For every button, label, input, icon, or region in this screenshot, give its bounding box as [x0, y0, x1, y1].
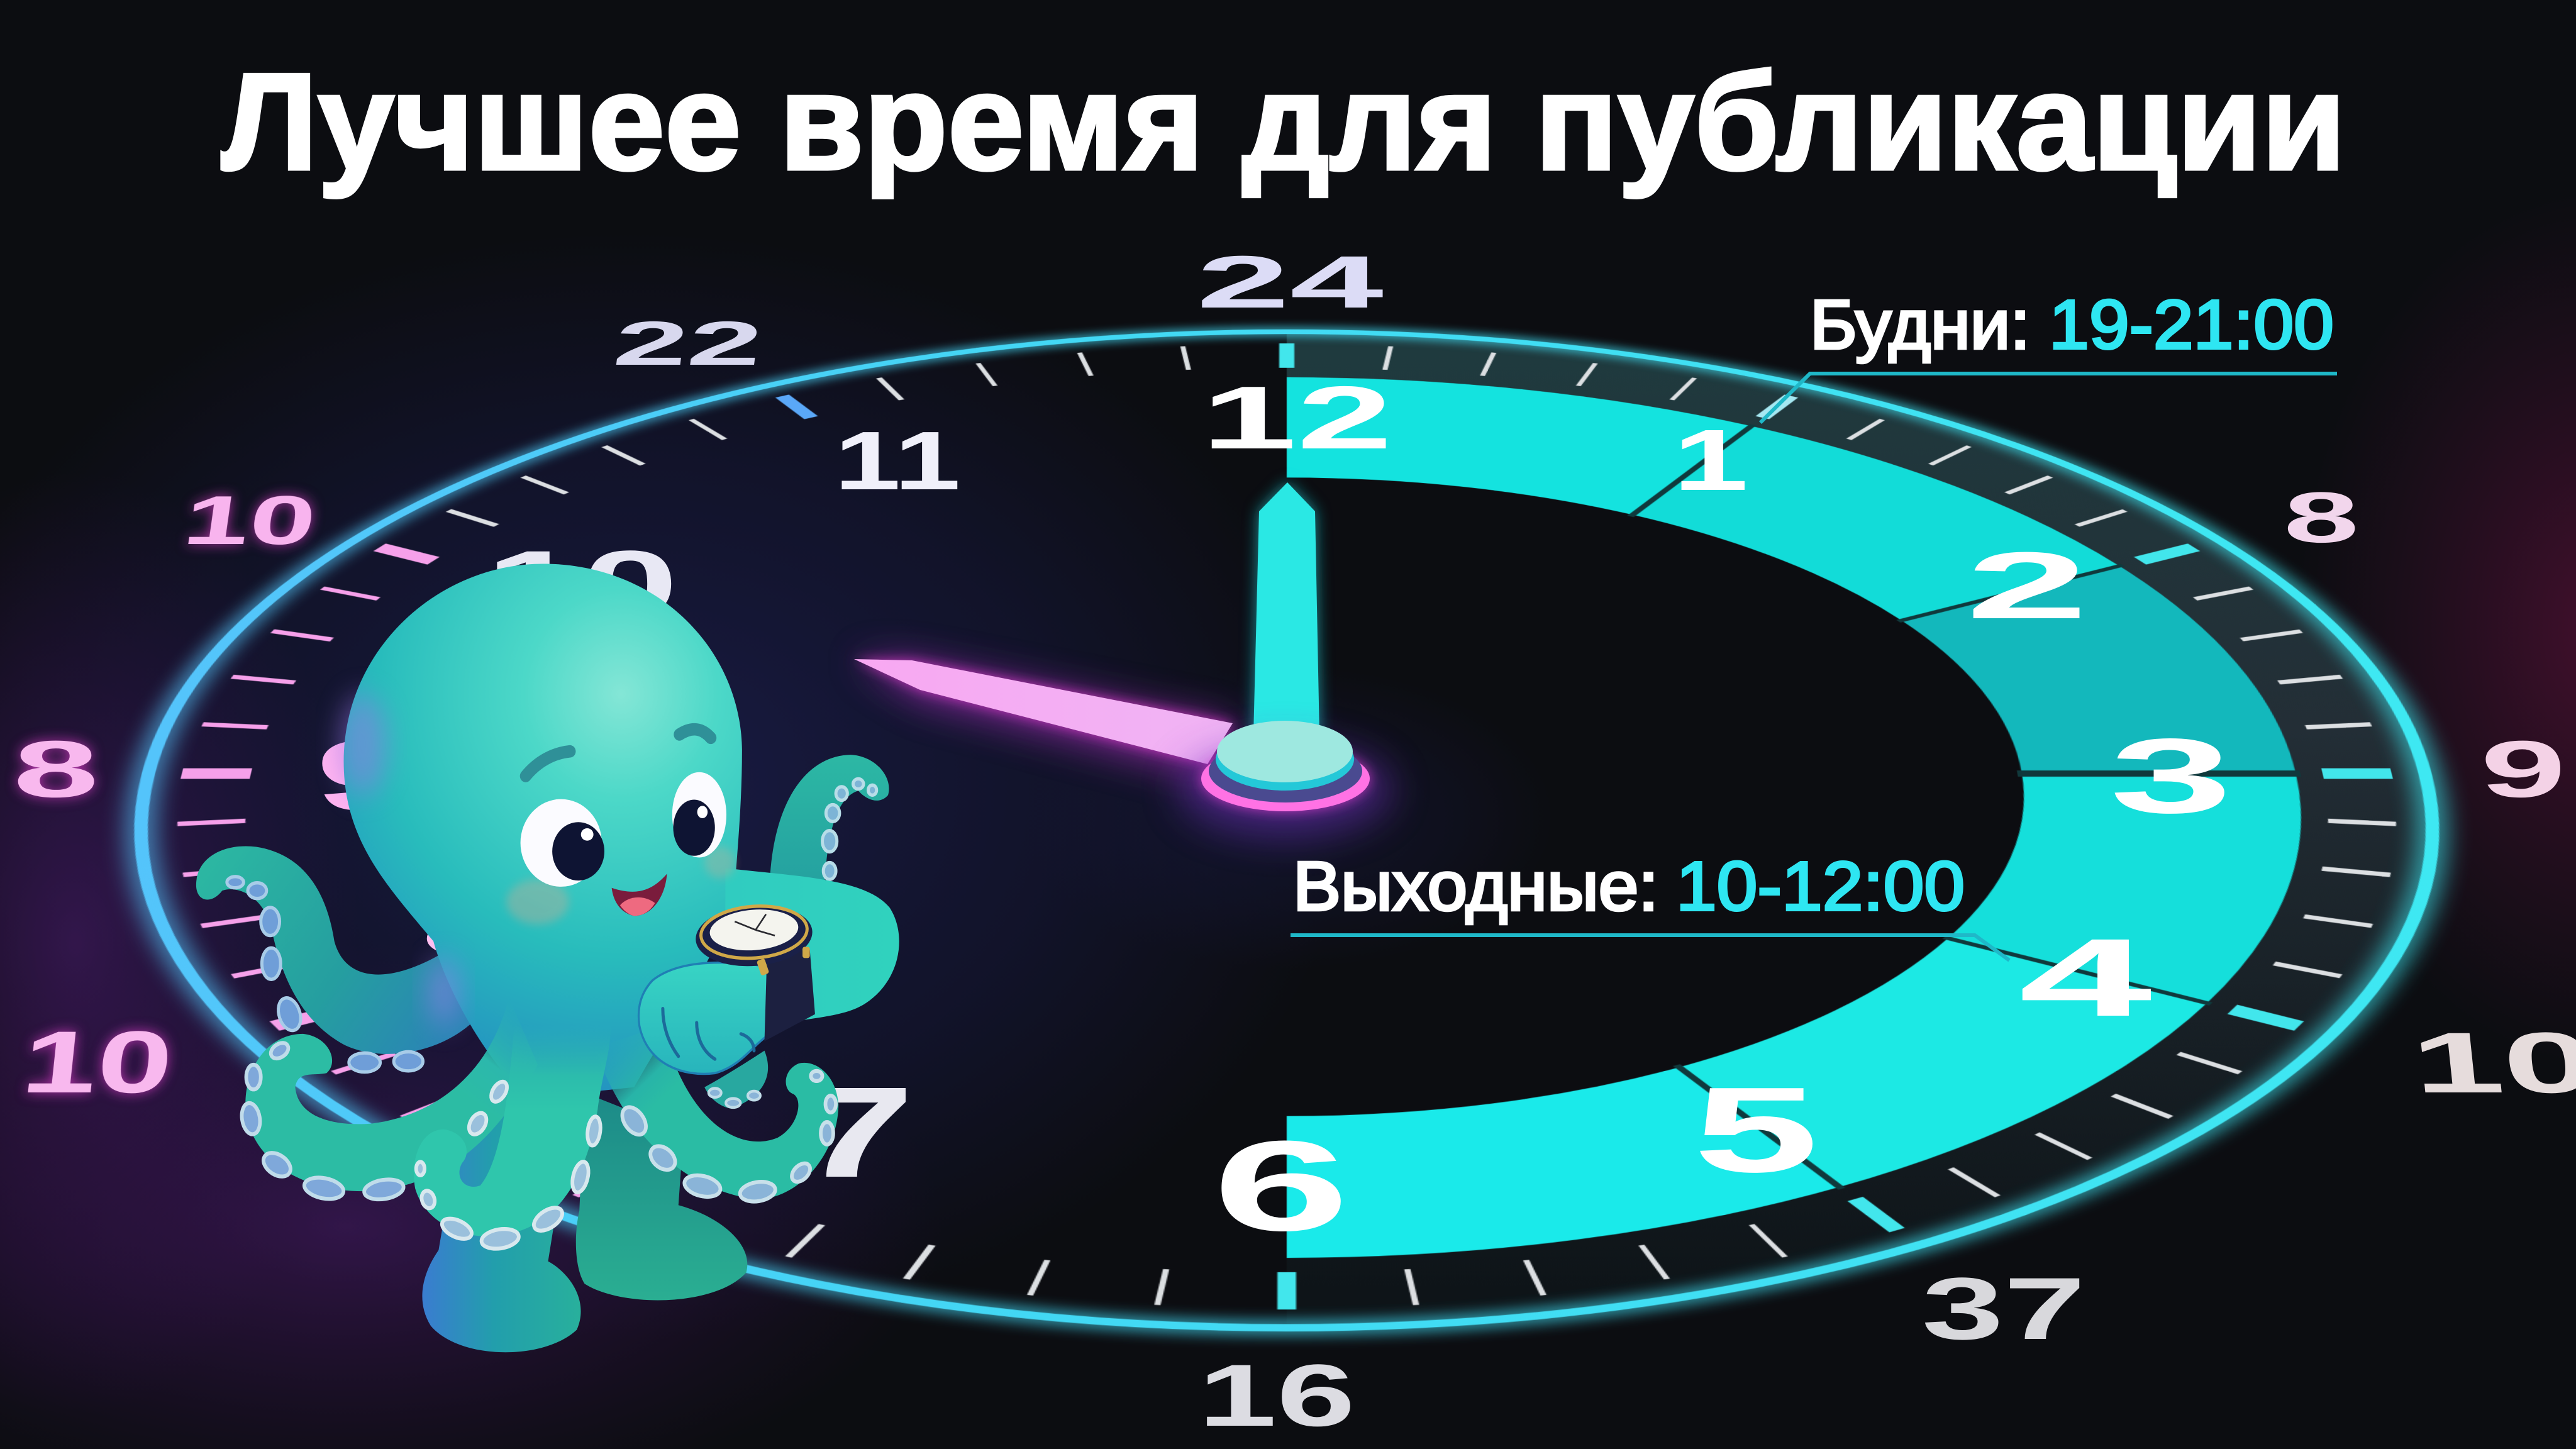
wristwatch — [694, 901, 815, 1041]
lower left big tentacle — [240, 997, 538, 1202]
mouth — [612, 874, 667, 916]
hour ticks — [46, 343, 2528, 1309]
hour numerals: 10 — [486, 531, 678, 636]
outer numerals: 10 — [179, 482, 321, 559]
small arm under hand — [704, 1051, 768, 1109]
left upper tentacle — [196, 846, 480, 1072]
hour numerals: 6 — [1213, 1114, 1350, 1258]
hour numerals: 2 — [1966, 532, 2088, 638]
hour numerals — [316, 368, 2233, 1258]
hour numerals: 3 — [2109, 716, 2233, 835]
watch arm and hand — [639, 868, 899, 1074]
title: Лучшее время для публикации — [221, 45, 2346, 199]
outer numerals: 8 — [2284, 478, 2359, 558]
hour numerals: 5 — [1693, 1062, 1819, 1197]
outer numerals: 16 — [1198, 1346, 1355, 1445]
left leg — [422, 1099, 581, 1352]
outer numerals: 22 — [610, 309, 766, 379]
outer numerals: 9 — [2480, 724, 2566, 814]
callout: weekdays: 19-21:00 — [2049, 286, 2334, 364]
hour numerals: 7 — [796, 1060, 915, 1204]
minute ticks — [286, 347, 2517, 1305]
right leg — [576, 1093, 747, 1300]
pink minute ticks — [84, 588, 704, 1196]
outer numerals: 37 — [1922, 1259, 2085, 1358]
head and body — [340, 564, 742, 1099]
clock face in perspective — [109, 321, 2465, 1346]
raised back tentacle — [770, 755, 889, 891]
cyan hand — [1253, 482, 1319, 736]
callout: weekdays — [1760, 286, 2337, 423]
outer ring — [4, 331, 2570, 1328]
outer numerals: 24 — [1196, 241, 1384, 324]
outer ring glow — [4, 331, 2570, 1328]
tick band shading — [1287, 354, 2489, 1292]
blush — [506, 847, 736, 924]
outer numerals: 10 — [2407, 1015, 2576, 1111]
callout: weekends: 10-12:00 — [1676, 848, 1965, 925]
hour numerals: 9 — [316, 721, 411, 831]
hour numerals: 4 — [2019, 916, 2152, 1040]
callout: weekends — [1291, 848, 2009, 960]
right lower tentacle — [595, 1025, 838, 1204]
outer numerals: 10 — [18, 1013, 177, 1111]
hour numerals: 12 — [1201, 368, 1392, 468]
eyebrows — [526, 730, 711, 776]
hour numerals: 11 — [834, 414, 961, 507]
left eye — [521, 799, 604, 887]
hour numerals: 1 — [1673, 412, 1748, 509]
outer numerals: 8 — [13, 724, 99, 814]
pink hand — [854, 659, 1233, 780]
callout: weekdays: Будни: — [1810, 286, 2030, 364]
clock hub — [1179, 721, 1392, 836]
highlighted time wedge — [1287, 377, 2413, 1258]
right eye — [672, 772, 726, 857]
callout: weekends: Выходные: — [1293, 848, 1658, 925]
hour numerals: 8 — [418, 899, 519, 1012]
center front tentacle — [414, 1025, 611, 1251]
